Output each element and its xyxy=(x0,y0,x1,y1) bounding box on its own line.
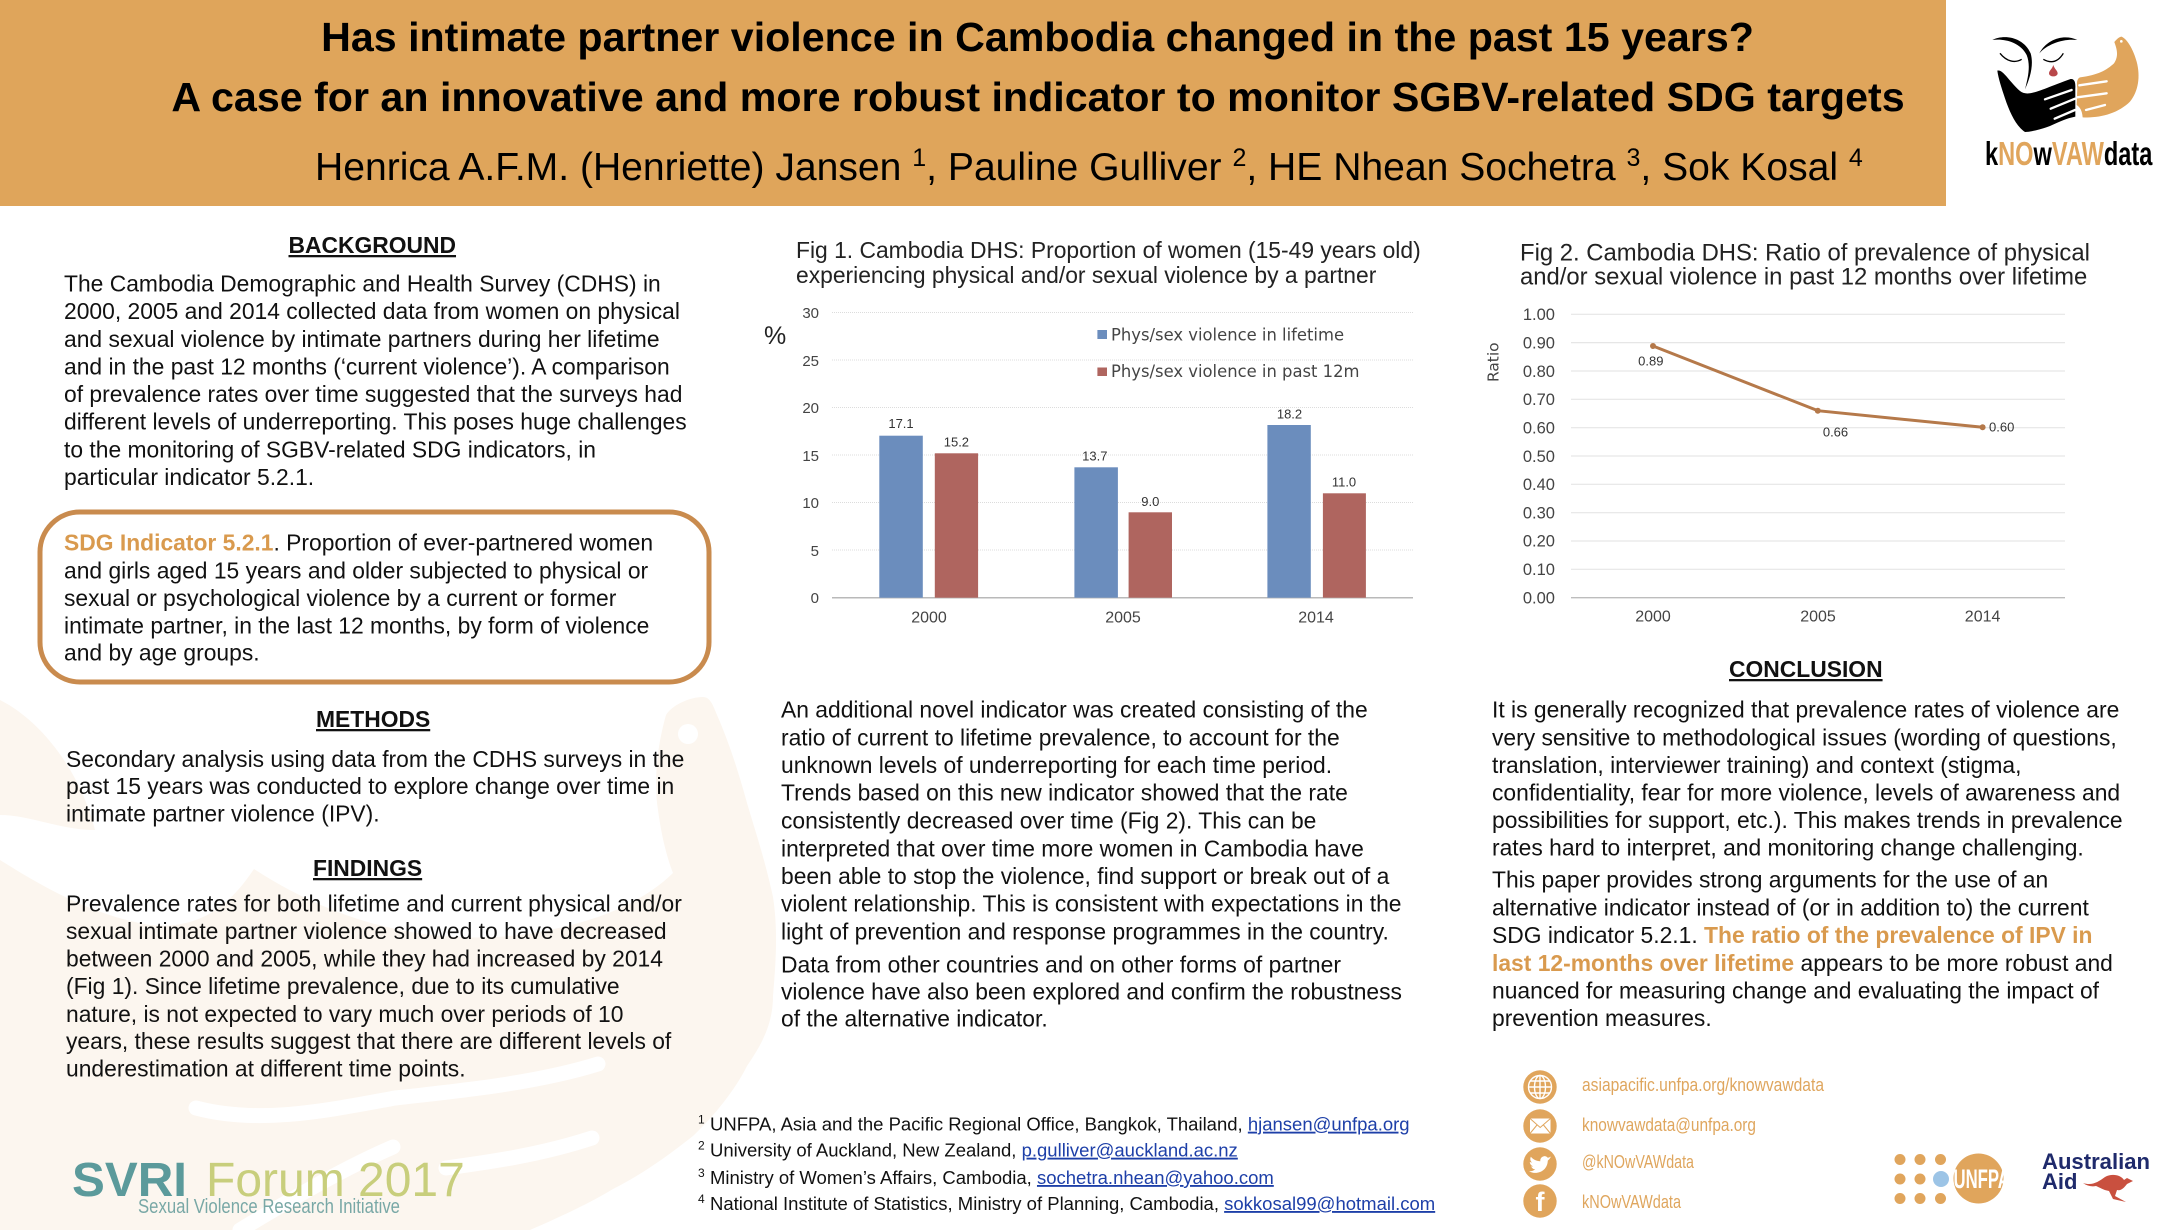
x axis labels xyxy=(1635,609,2000,626)
contact links xyxy=(1523,1070,1825,1218)
y axis title: Ratio xyxy=(1484,342,1502,382)
y axis labels: 0.20 xyxy=(1523,532,1555,550)
facebook handle: kNOwVAWdata xyxy=(1582,1192,1682,1212)
background text: and sexual violence by intimate partners during her lifetime xyxy=(64,326,660,352)
data labels: 0.89 xyxy=(1638,354,1663,369)
data labels: 18.2 xyxy=(1277,406,1302,421)
conclusion text: nuanced for measuring change and evaluating the impact of xyxy=(1492,977,2100,1003)
authors: 4 xyxy=(1849,144,1863,172)
data labels: 9.0 xyxy=(1141,494,1159,509)
y axis labels: 15 xyxy=(802,448,819,465)
logo: Australian Aid: Australian xyxy=(2042,1149,2150,1174)
text block: novel indicator: violence have also been explored and confirm the robustness xyxy=(781,978,1402,1004)
y axis labels: 0.90 xyxy=(1523,334,1555,352)
footnotes: affiliations: hjansen@unfpa.org xyxy=(1248,1114,1410,1135)
y axis labels: 1.00 xyxy=(1523,306,1555,324)
y axis labels: 0.40 xyxy=(1523,476,1555,494)
website: asiapacific.unfpa.org/knowvawdata xyxy=(1582,1075,1825,1095)
title: A case for an innovative and more robust indicator to monitor SGBV-related SDG targets xyxy=(171,74,1905,120)
methods text: intimate partner violence (IPV). xyxy=(66,800,380,826)
conclusion text: translation, interviewer training) and context (stigma, xyxy=(1492,752,2021,778)
text block: novel indicator: violent relationship. This is consistent with expectations in the xyxy=(781,891,1402,917)
text block: novel indicator: consistently decreased over time (Fig 2). This can be xyxy=(781,808,1316,834)
y axis labels: 0.70 xyxy=(1523,391,1555,409)
panel: findings xyxy=(66,855,682,1082)
y axis labels: 0 xyxy=(811,590,819,607)
y axis labels: 0.00 xyxy=(1523,590,1555,608)
methods text: past 15 years was conducted to explore change over time in xyxy=(66,773,674,799)
logo: UNFPA: UNFPA xyxy=(1954,1164,2010,1194)
conclusion text: very sensitive to methodological issues (wording of questions, xyxy=(1492,724,2117,750)
text block: novel indicator: Data from other countries and on other forms of partner xyxy=(781,951,1341,977)
figure 2 title xyxy=(1520,240,2090,290)
footnotes: affiliations: 2 xyxy=(698,1139,705,1153)
icon: facebook: f xyxy=(1536,1187,1546,1217)
title: Has intimate partner violence in Cambodia changed in the past 15 years? xyxy=(321,14,1754,60)
data labels: 17.1 xyxy=(888,416,914,431)
figure 1 title: Fig 1. Cambodia DHS: Proportion of women (15-49 years old) xyxy=(796,237,1421,263)
logo: SVRI Forum 2017: Forum 2017 xyxy=(206,1154,465,1207)
conclusion text: confidentiality, fear for more violence, levels of awareness and xyxy=(1492,780,2120,806)
data labels: 0.60 xyxy=(1989,420,2014,435)
data labels: 15.2 xyxy=(944,435,969,450)
background text: 2000, 2005 and 2014 collected data from women on physical xyxy=(64,298,680,324)
conclusion text: alternative indicator instead of (or in addition to) the current xyxy=(1492,894,2089,920)
footnotes: affiliations: p.gulliver@auckland.ac.nz xyxy=(1022,1140,1238,1161)
y axis unit: % xyxy=(764,322,786,350)
icon: twitter xyxy=(1523,1147,1557,1181)
text block: novel indicator: An additional novel indicator was created consisting of the xyxy=(781,697,1368,723)
background text: different levels of underreporting. This poses huge challenges xyxy=(64,409,687,435)
legend xyxy=(1097,326,1360,381)
authors: , HE Nhean Sochetra xyxy=(1246,146,1626,189)
x axis labels: 2005 xyxy=(1800,609,1836,626)
findings text: between 2000 and 2005, while they had increased by 2014 xyxy=(66,946,663,972)
footnotes: affiliations: 4 xyxy=(698,1192,705,1206)
background text: The Cambodia Demographic and Health Survey (CDHS) in xyxy=(64,270,661,296)
methods text xyxy=(66,746,684,826)
heading: findings: FINDINGS xyxy=(313,855,422,881)
findings text: nature, is not expected to vary much over periods of 10 xyxy=(66,1001,623,1027)
conclusion text: last 12-months over lifetime appears to be more robust and xyxy=(1492,950,2113,976)
callout: SDG indicator 5.2.1: and by age groups. xyxy=(64,640,260,666)
header banner xyxy=(0,0,1946,206)
data labels: 11.0 xyxy=(1332,475,1356,490)
text block: novel indicator: unknown levels of underreporting for each time period. xyxy=(781,752,1332,778)
authors: Henrica A.F.M. (Henriette) Jansen xyxy=(315,146,901,189)
findings text: (Fig 1). Since lifetime prevalence, due to its cumulative xyxy=(66,973,620,999)
footnotes: affiliations: sokkosal99@hotmail.com xyxy=(1224,1193,1435,1214)
y axis labels: 30 xyxy=(802,305,819,322)
findings text: sexual intimate partner violence showed to have decreased xyxy=(66,918,667,944)
x axis labels: 2000 xyxy=(1635,609,1671,626)
heading: methods: METHODS xyxy=(316,706,430,732)
authors: , Pauline Gulliver xyxy=(926,146,1232,189)
text block: novel indicator xyxy=(781,697,1402,1032)
callout: SDG indicator 5.2.1 xyxy=(40,512,709,682)
footnotes: affiliations: National Institute of Statistics, Ministry of Planning, Cambodia, xyxy=(710,1193,1224,1214)
figure 1 title xyxy=(796,237,1421,288)
background text: particular indicator 5.2.1. xyxy=(64,464,314,490)
legend: Phys/sex violence in past 12m xyxy=(1111,362,1360,381)
data labels xyxy=(1638,354,2014,440)
x axis labels: 2014 xyxy=(1298,610,1334,627)
conclusion text: possibilities for support, etc.). This makes trends in prevalence xyxy=(1492,807,2123,833)
legend: Phys/sex violence in lifetime xyxy=(1111,326,1344,344)
panel: background xyxy=(64,232,687,490)
footnotes: affiliations: UNFPA, Asia and the Pacific Regional Office, Bangkok, Thailand, xyxy=(710,1114,1248,1135)
conclusion text: It is generally recognized that prevalence rates of violence are xyxy=(1492,697,2119,723)
background text: to the monitoring of SGBV-related SDG indicators, in xyxy=(64,436,596,462)
background text xyxy=(64,270,687,490)
logo: SVRI Forum 2017: Sexual Violence Research Initiative xyxy=(138,1196,400,1218)
x axis labels xyxy=(911,610,1334,627)
footnotes: affiliations: University of Auckland, New Zealand, xyxy=(710,1140,1022,1161)
footnotes: affiliations xyxy=(698,1113,1435,1214)
x axis labels: 2014 xyxy=(1965,609,2000,626)
conclusion text: prevention measures. xyxy=(1492,1005,1712,1031)
x axis labels: 2000 xyxy=(911,610,947,627)
findings text: Prevalence rates for both lifetime and current physical and/or xyxy=(66,890,682,916)
findings text: years, these results suggest that there are different levels of xyxy=(66,1028,672,1054)
text block: novel indicator: ratio of current to lifetime prevalence, to account for the xyxy=(781,724,1340,750)
data line xyxy=(1650,343,1986,430)
y axis labels: 5 xyxy=(811,543,819,560)
methods text: Secondary analysis using data from the CDHS surveys in the xyxy=(66,746,684,772)
y axis labels: 25 xyxy=(802,353,819,370)
logo: SVRI Forum 2017: SVRI xyxy=(72,1154,187,1207)
findings text xyxy=(66,890,682,1082)
authors: 1 xyxy=(912,144,926,172)
data labels xyxy=(888,406,1356,509)
y axis labels: 20 xyxy=(802,400,819,417)
bars xyxy=(879,425,1366,598)
figure 2 title: and/or sexual violence in past 12 months over lifetime xyxy=(1520,264,2087,290)
footnotes: affiliations: 1 xyxy=(698,1113,705,1127)
y axis labels xyxy=(1523,306,1555,608)
y axis labels xyxy=(802,305,819,607)
findings text: underestimation at different time points. xyxy=(66,1056,466,1082)
callout: SDG indicator 5.2.1: SDG Indicator 5.2.1. Proportion of ever-partnered women xyxy=(64,530,653,556)
figure 2 title: Fig 2. Cambodia DHS: Ratio of prevalence of physical xyxy=(1520,240,2090,267)
y axis labels: 0.50 xyxy=(1523,448,1555,466)
callout: SDG indicator 5.2.1: sexual or psychological violence by a current or former xyxy=(64,585,617,611)
footnotes: affiliations: sochetra.nhean@yahoo.com xyxy=(1037,1167,1274,1188)
y axis labels: 0.60 xyxy=(1523,420,1555,438)
panel: methods xyxy=(66,706,684,826)
logo: UNFPA xyxy=(1894,1154,2010,1204)
text block: novel indicator: Trends based on this new indicator showed that the rate xyxy=(781,780,1348,806)
callout: SDG indicator 5.2.1: intimate partner, in the last 12 months, by form of violence xyxy=(64,612,649,638)
icon: globe xyxy=(1523,1070,1557,1104)
text block: novel indicator: light of prevention and response programmes in the country. xyxy=(781,918,1389,944)
footnotes: affiliations: Ministry of Women’s Affairs, Cambodia, xyxy=(710,1167,1037,1188)
text block: novel indicator: been able to stop the violence, find support or break out of a xyxy=(781,863,1390,889)
y axis labels: 0.30 xyxy=(1523,504,1555,522)
background watermark: faint hand xyxy=(0,697,776,1230)
y axis labels: 0.10 xyxy=(1523,561,1555,579)
background text: of prevalence rates over time suggested that the surveys had xyxy=(64,381,682,407)
authors: , Sok Kosal xyxy=(1640,146,1849,189)
heading: background: BACKGROUND xyxy=(288,232,456,258)
title xyxy=(171,14,1905,120)
authors: 2 xyxy=(1232,144,1246,172)
y axis labels: 0.80 xyxy=(1523,363,1555,381)
callout: SDG indicator 5.2.1: and girls aged 15 years and older subjected to physical or xyxy=(64,558,649,584)
conclusion text: This paper provides strong arguments for the use of an xyxy=(1492,867,2048,893)
icon: kangaroo xyxy=(2083,1175,2133,1202)
logo: Australian Aid xyxy=(2042,1149,2150,1202)
logo: SVRI Forum 2017 xyxy=(72,1154,465,1218)
x axis labels: 2005 xyxy=(1105,610,1141,627)
conclusion text: SDG indicator 5.2.1. The ratio of the prevalence of IPV in xyxy=(1492,922,2092,948)
conclusion text xyxy=(1492,697,2123,1031)
text block: novel indicator: interpreted that over time more women in Cambodia have xyxy=(781,835,1364,861)
panel: conclusion xyxy=(1492,656,2123,1031)
footnotes: affiliations: 3 xyxy=(698,1166,705,1180)
logo: Australian Aid: Aid xyxy=(2042,1169,2077,1194)
icon: envelope xyxy=(1523,1109,1557,1143)
data labels: 0.66 xyxy=(1823,425,1848,440)
figure 1 title: experiencing physical and/or sexual violence by a partner xyxy=(796,262,1377,288)
email: knowvawdata@unfpa.org xyxy=(1582,1115,1756,1135)
text block: novel indicator: of the alternative indicator. xyxy=(781,1006,1048,1032)
logo: kNOwVAWdata xyxy=(1985,37,2153,173)
authors: 3 xyxy=(1626,144,1640,172)
twitter handle: @kNOwVAWdata xyxy=(1582,1152,1695,1172)
logo wordmark: kNOwVAWdata xyxy=(1985,136,2153,173)
bar chart: figure 1 xyxy=(764,305,1413,627)
data labels: 13.7 xyxy=(1082,449,1107,464)
y axis labels: 10 xyxy=(802,495,819,512)
icon: covered face with hands xyxy=(1992,37,2139,132)
conclusion text: rates hard to interpret, and monitoring change challenging. xyxy=(1492,834,2084,860)
line chart: figure 2 xyxy=(1484,306,2065,626)
icon: facebook xyxy=(1523,1184,1557,1218)
heading: conclusion: CONCLUSION xyxy=(1729,656,1883,682)
background text: and in the past 12 months (‘current violence’). A comparison xyxy=(64,354,670,380)
